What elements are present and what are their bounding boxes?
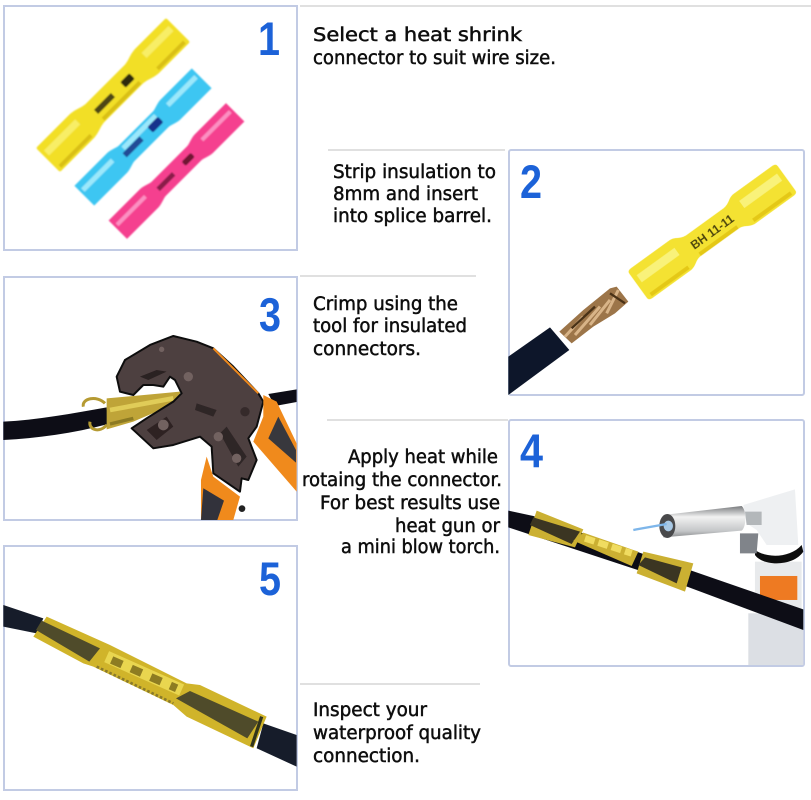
text: step 2 instruction: Strip insulation to	[333, 162, 496, 183]
step number 2: 2	[520, 155, 542, 208]
text: step 4 instruction: heat gun or	[395, 516, 500, 537]
icon: yellow connector	[36, 18, 190, 172]
text: step 4 instruction: a mini blow torch.	[341, 537, 500, 558]
icon: yellow connector	[627, 163, 797, 301]
step number 5: 5	[259, 552, 281, 605]
step number 4: 4	[520, 424, 543, 477]
text: step 2 instruction: 8mm and insert	[333, 184, 478, 205]
panel: step 1 select connector	[4, 6, 297, 250]
text: step 1 instruction	[313, 25, 556, 69]
text: step 5 instruction: connection.	[313, 746, 420, 767]
icon: shrunk gold connector	[33, 617, 267, 748]
panel: step 3 crimp	[3, 277, 297, 520]
panel: step 2 strip and insert	[508, 150, 804, 395]
icon: pink connector	[109, 103, 244, 239]
text: step 3 instruction	[313, 294, 467, 360]
icon: wire	[3, 389, 297, 440]
text: step 4 instruction	[302, 447, 502, 558]
text: step 3 instruction: Crimp using the	[313, 294, 458, 315]
text: step 4 instruction: rotaing the connector.	[302, 470, 502, 491]
panel: step 5 inspect	[3, 546, 297, 790]
text: step 2 instruction	[333, 162, 496, 227]
text: step 5 instruction	[313, 700, 481, 767]
icon: yellow connector: BH 11-11	[688, 211, 737, 252]
icon: wire	[3, 605, 297, 767]
icon: crimping tool	[117, 336, 297, 520]
icon: wire with connector	[508, 511, 803, 630]
icon: connector in jaws	[83, 392, 180, 430]
text: step 4 instruction: Apply heat while	[348, 447, 498, 468]
panel: step 4 apply heat	[508, 420, 804, 666]
text: step 1 instruction: Select a heat shrink	[313, 25, 522, 46]
text: step 5 instruction: Inspect your	[313, 700, 427, 721]
text: step 1 instruction: connector to suit wire size.	[313, 48, 556, 69]
step number 3: 3	[259, 288, 281, 341]
text: step 3 instruction: connectors.	[313, 339, 421, 360]
text: step 5 instruction: waterproof quality	[313, 723, 481, 744]
step number 1: 1	[258, 12, 280, 65]
icon: blow torch	[633, 489, 798, 553]
icon: gas can	[748, 545, 803, 665]
icon: stripped copper wire	[508, 287, 628, 395]
text: step 3 instruction: tool for insulated	[313, 316, 467, 337]
text: step 2 instruction: into splice barrel.	[333, 206, 492, 227]
icon: blue connector	[74, 68, 212, 206]
text: step 4 instruction: For best results use	[320, 493, 500, 514]
